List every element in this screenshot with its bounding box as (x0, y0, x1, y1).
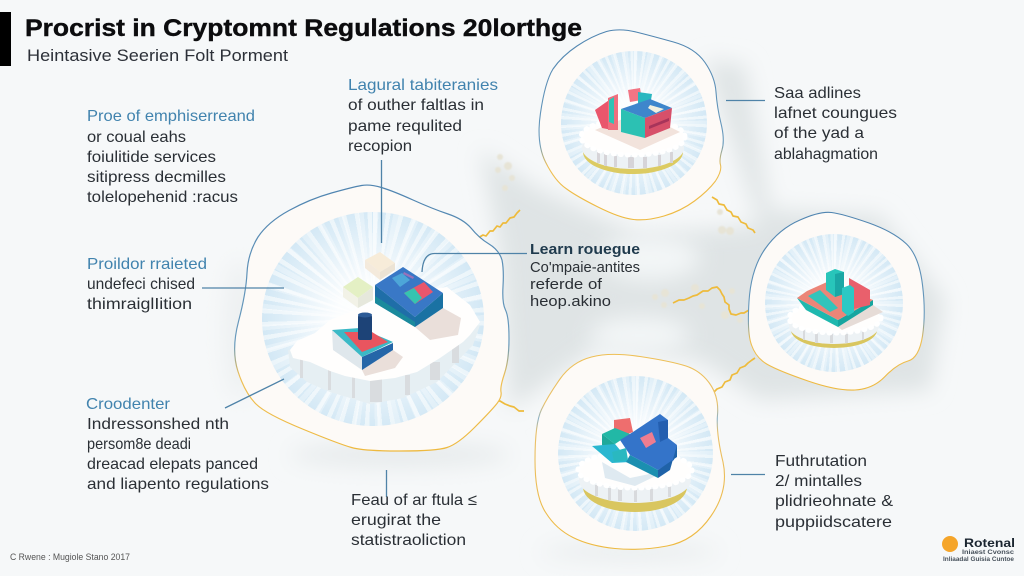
blocks (595, 88, 680, 150)
connector: gold dotted lines (480, 196, 756, 412)
text block: left top (87, 108, 255, 206)
isometric platform and blocks (288, 252, 480, 404)
text block: left bottom: persom8e deadi (87, 436, 191, 453)
text block: left top: foiulitide services (87, 149, 216, 166)
cake side (582, 127, 684, 169)
logo: Inliaadal Guisia Cuntoe (943, 557, 1015, 563)
sunburst rays (262, 212, 484, 426)
panel: bottom platform (534, 354, 726, 550)
leader lines (202, 100, 765, 497)
panel: main platform (234, 184, 510, 452)
cake side (579, 457, 691, 503)
sunburst rays (558, 376, 713, 531)
cake top (789, 303, 881, 333)
cake top (578, 452, 692, 488)
text block: top center: recopion (348, 138, 412, 155)
text block: right bottom: puppiidscatere (775, 514, 892, 531)
text block: left top: tolelopehenid :racus (87, 189, 238, 206)
text block: bottom center: statistraoliction (351, 532, 466, 549)
text block: top center: Lagural tabiteranies (348, 77, 498, 94)
text block: right top: of the yad a (774, 125, 864, 142)
text block: left middle (87, 256, 207, 313)
subtitle: Heintasive Seerien Folt Porment (27, 47, 288, 65)
sunburst rays (561, 51, 707, 195)
text block: center (530, 242, 640, 310)
sunburst rays (765, 234, 903, 372)
text block: bottom center: erugirat the (351, 512, 441, 529)
logo (942, 536, 1015, 563)
text block: right bottom: plidrieohnate & (775, 493, 893, 510)
gold base (583, 130, 683, 174)
text block: center: Co'mpaie-antites (530, 260, 640, 276)
logo: Iniaest Cvonsc (962, 550, 1015, 556)
blob outline (748, 212, 925, 391)
text block: left bottom: and liapento regulations (87, 476, 269, 493)
panel: middle right platform (748, 212, 925, 391)
footer source: C Rwene : Mugiole Stano 2017 (10, 552, 130, 562)
text block: right top: lafnet coungues (774, 105, 897, 122)
text block: top center (348, 77, 498, 155)
gold base (583, 462, 687, 512)
blue box (375, 267, 443, 327)
text block: center: referde of (530, 277, 603, 293)
green box (343, 277, 373, 308)
text block: left top: or coual eahs (87, 129, 186, 146)
panel: top right platform (538, 29, 724, 220)
text block: top center: pame requlited (348, 118, 462, 135)
text block: left bottom: dreacad elepats panced (87, 456, 258, 473)
text block: left bottom: Indressonshed nth (87, 416, 229, 433)
text block: right bottom (775, 453, 893, 531)
isometric cake and blocks (788, 269, 884, 348)
isometric cake and blocks (576, 414, 694, 512)
joystick block (332, 312, 393, 370)
platform side (288, 325, 480, 404)
text block: right top: Saa adlines (774, 85, 861, 102)
blob outline (538, 29, 724, 220)
text block: center: heop.akino (530, 294, 611, 310)
text block: right bottom: 2/ mintalles (775, 473, 862, 490)
text block: bottom center (351, 492, 477, 549)
blocks (592, 414, 677, 478)
text block: right bottom: Futhrutation (775, 453, 867, 470)
blocks (797, 269, 883, 330)
blob outline (534, 354, 726, 550)
isometric cake and blocks (579, 88, 688, 174)
text block: left bottom: Croodenter (86, 396, 171, 413)
logo: Rotenal (964, 536, 1015, 550)
title accent bar (0, 12, 11, 66)
cake side (789, 308, 879, 344)
shadows (415, 308, 461, 340)
blob outline (234, 184, 510, 452)
text block: bottom center: Feau of ar ftula ≤ (351, 492, 477, 509)
text block: left middle: Proildor rraieted (87, 256, 207, 273)
text block: left middle: undefeci chised (87, 276, 195, 293)
text block: top center: of outher faltlas in (348, 97, 484, 114)
text block: left top: Proe of emphiserreand (87, 108, 255, 125)
cream box (365, 252, 395, 280)
gold base (791, 312, 877, 348)
text block: right top: ablahagmation (774, 146, 878, 163)
text block: left top: sitipress decmilles (87, 169, 226, 186)
cake top (581, 119, 685, 155)
text block: right top (774, 85, 897, 163)
text block: left bottom (86, 396, 269, 493)
title: Procrist in Cryptomnt Regulations 20lorthge (25, 15, 582, 42)
text block: center: Learn rouegue (530, 242, 640, 258)
text block: left middle: thimraiglIition (87, 296, 192, 313)
platform top (290, 287, 480, 381)
